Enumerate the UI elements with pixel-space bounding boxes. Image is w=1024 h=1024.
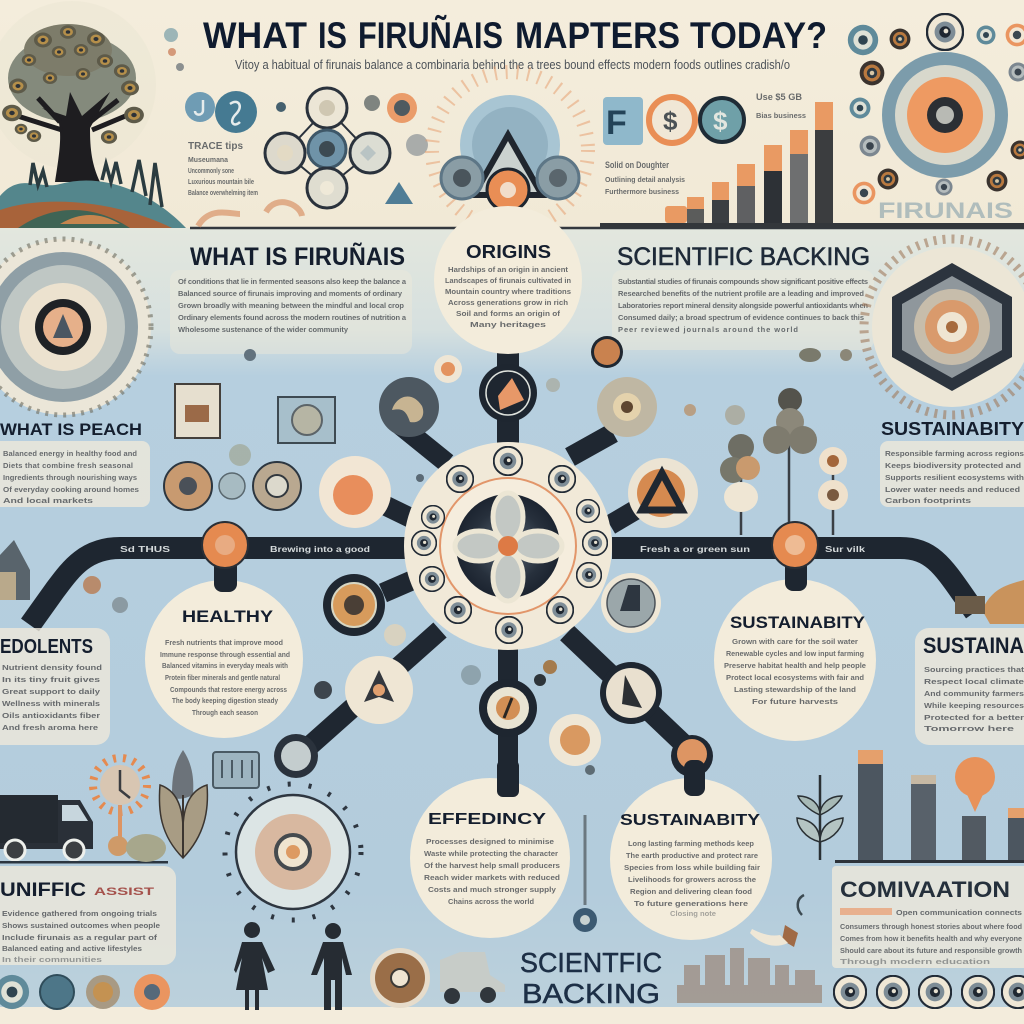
red sub-label: ASSIST	[94, 886, 154, 898]
connector: left path	[30, 548, 405, 625]
text block: Diets that combine fresh seasonal	[3, 461, 133, 470]
title: MAPTERS	[515, 15, 680, 56]
node: lower right orange coin	[671, 735, 713, 777]
text block: Keeps biodiversity protected and	[885, 461, 1021, 470]
background: cream bottom strip	[0, 1007, 1024, 1024]
text block: In its tiny fruit gives	[2, 675, 100, 684]
illustration: tree	[0, 1, 186, 228]
illustration: orange target	[882, 52, 1008, 178]
heading: SUSTAINABITY	[881, 419, 1024, 439]
heading: WHAT IS PEACH	[0, 420, 142, 439]
text block: Fresh nutrients that improve mood	[165, 638, 283, 647]
connector: node stems	[214, 555, 807, 796]
text block: chart caption: Outlining detail analysis	[605, 175, 685, 184]
text block: Lower water needs and reduced	[885, 485, 1020, 494]
icons: F, orange ring, dollar ring	[603, 97, 744, 145]
panel: healthy circle	[145, 580, 303, 738]
text block: Chains across the world	[448, 897, 534, 906]
heading: HEALTHY	[182, 607, 274, 626]
text block: Nutrient density found	[2, 663, 103, 672]
heading: WHAT IS FIRUÑAIS	[190, 241, 405, 271]
text block: Tomorrow here	[924, 724, 1014, 733]
text block: And local markets	[3, 496, 93, 505]
path labels: Brewing into a good	[270, 545, 370, 554]
text block	[160, 638, 290, 717]
connector: stems over circles	[497, 770, 705, 797]
panel: sustainability lower circle	[610, 778, 772, 940]
panel: edolents	[0, 628, 110, 745]
text block: Of everyday cooking around homes	[3, 485, 139, 494]
icon: four petal flower	[455, 493, 562, 601]
text block: Consumers through honest stories about where food	[840, 922, 1022, 931]
panel: sustainability circle	[714, 579, 876, 741]
text block: Ingredients through nourishing ways	[3, 473, 137, 482]
text block: Laboratories report mineral density alongside powerful antioxidants when	[618, 301, 868, 310]
text block: The body keeping digestion steady	[172, 696, 279, 705]
node: west orange circle	[319, 456, 391, 528]
connector: diagonal spokes	[305, 425, 690, 775]
node: south east cream circle	[601, 573, 661, 633]
node: orange junction right	[772, 522, 818, 568]
small flower icon	[750, 895, 804, 947]
text block: Open communication connects	[896, 908, 1022, 917]
text block: Substantial studies of firunais compounds show significant positive effects	[618, 277, 868, 286]
icon: sunburst clock	[93, 758, 166, 862]
text block: Great support to daily	[2, 687, 101, 696]
icon: orange connector node	[487, 169, 529, 220]
central hub	[404, 442, 612, 650]
icon: tall tool	[573, 815, 597, 932]
path labels: Fresh a or green sun	[640, 545, 750, 554]
text block: Protected for a better	[924, 713, 1024, 722]
icons: ring of hub coins	[412, 447, 607, 643]
text block: In their communities	[2, 955, 102, 964]
panel: what is firunais	[170, 241, 412, 354]
icon: leaf	[159, 750, 207, 858]
icons: small trees	[720, 388, 848, 535]
text block: upper left note: Museumana	[188, 155, 229, 164]
panel: sustaina right	[915, 628, 1024, 745]
text block	[924, 665, 1024, 733]
text block: Livelihoods for growers across the	[628, 875, 756, 884]
connector: right path	[612, 548, 975, 612]
text block: Ordinary elements found across the modern routines of nutrition a	[178, 313, 407, 322]
text block: Balanced energy in healthy food and	[3, 449, 137, 458]
text block	[2, 909, 160, 964]
text block: Compounds that restore energy across	[170, 685, 287, 694]
text block: Researched benefits of the nutrient profile are a leading and improved	[618, 289, 864, 298]
panel: origins circle	[434, 206, 582, 354]
text block: Oils antioxidants fiber	[2, 711, 100, 720]
text block: Evidence gathered from ongoing trials	[2, 909, 157, 918]
text block: bar chart note: Bias business	[756, 111, 806, 120]
text block: And fresh aroma here	[2, 723, 98, 732]
text block: Include firunais as a regular part of	[2, 933, 158, 942]
text block: Costs and much stronger supply	[428, 885, 557, 894]
text block: Balanced source of firunais improving and moments of ordinary	[178, 289, 403, 298]
illustration: dotted ring	[225, 784, 361, 920]
title	[203, 14, 827, 56]
node: north west photo circle	[379, 377, 439, 437]
icons: left field coins	[164, 384, 335, 510]
background: cream top band	[0, 0, 1024, 230]
panel: comivaation	[832, 866, 1024, 968]
node: south west dark circle	[323, 574, 385, 636]
text block: Long lasting farming methods keep	[628, 839, 754, 848]
diagram: four linked rings	[265, 88, 390, 208]
text block: For future harvests	[752, 697, 838, 706]
icons: small coins top centre	[198, 93, 428, 226]
text block: Soil and forms an origin of	[456, 309, 561, 318]
icons: F, orange ring, dollar ring: F	[606, 104, 627, 142]
text block: Mountain country where traditions	[445, 287, 571, 296]
text block: To future generations here	[634, 899, 748, 908]
text block: Waste while protecting the character	[424, 849, 558, 858]
text block: Wholesome sustenance of the wider community	[178, 325, 349, 334]
text block: The earth productive and protect rare	[626, 851, 758, 860]
text block	[840, 908, 1022, 966]
text block	[178, 277, 407, 334]
text block: upper left note: Uncommonly sone	[188, 166, 234, 175]
title: WHAT	[203, 15, 307, 56]
text block: Sourcing practices that	[924, 665, 1024, 674]
path labels	[120, 545, 866, 554]
text block: Species from loss while building fair	[624, 863, 760, 872]
path labels: Sd THUS	[120, 545, 171, 554]
node: bottom dark circle	[479, 679, 537, 737]
text block: Hardships of an origin in ancient	[448, 265, 569, 274]
panel: scientific backing	[612, 243, 874, 350]
icon: leaf plant	[797, 775, 843, 860]
text block: And community farmers	[924, 689, 1024, 698]
heading: scientific backing bottom	[520, 947, 662, 1009]
text block: upper left note: Luxurious mountain bile	[188, 177, 254, 186]
text block: chart caption	[605, 160, 685, 196]
text block	[3, 449, 139, 505]
orange highlight	[840, 908, 892, 915]
icon: delivery truck	[0, 795, 168, 864]
text block: Comes from how it benefits health and why everyone	[840, 934, 1022, 943]
title: FIRUÑAIS	[358, 14, 503, 56]
text block	[724, 637, 866, 706]
text block: Reach wider markets with reduced	[424, 873, 560, 882]
icon: wheel coin	[370, 948, 430, 1008]
text block: bar chart note	[756, 92, 806, 120]
panel: what is peach	[0, 420, 150, 507]
node: lower left grey coin	[274, 734, 318, 778]
icon: square device	[213, 752, 259, 788]
text block	[424, 837, 560, 906]
text block: Landscapes of firunais cultivated in	[445, 276, 571, 285]
text block: Carbon footprints	[885, 496, 971, 505]
text block: upper left note: TRACE tips	[188, 141, 243, 152]
text block: Balanced vitamins in everyday meals with	[162, 661, 288, 670]
text block: Through each season	[192, 708, 258, 717]
text block: Across generations grow in rich	[448, 298, 568, 307]
icon: car	[440, 952, 505, 1004]
icons: coins around target	[848, 14, 1024, 204]
text block: bar chart note: Use $5 GB	[756, 92, 803, 102]
text block: Supports resilient ecosystems with	[885, 473, 1024, 482]
text block: upper left note: Balance overwhelming item	[188, 188, 258, 197]
icons: F, orange ring, dollar ring: $	[663, 106, 678, 136]
icon: flower centre	[498, 536, 518, 556]
heading: SCIENTIFIC BACKING	[617, 243, 870, 271]
text block: chart caption: Furthermore business	[605, 187, 679, 196]
text block: Responsible farming across regions	[885, 449, 1024, 458]
watermark text: FIRUNAIS: FIRUNAIS	[878, 198, 1013, 223]
heading: EFFEDINCY	[428, 811, 546, 828]
text block: upper left note	[188, 141, 258, 197]
subtitle: Vitoy a habitual of firunais balance a combinaria behind the a trees bound effects modern foods outlines cradish/o	[235, 58, 790, 72]
heading: scientific backing bottom: BACKING	[522, 978, 660, 1009]
heading: scientific backing bottom: SCIENTFIC	[520, 947, 662, 978]
text block: Through modern education	[840, 957, 991, 966]
text block: Respect local climate	[924, 677, 1024, 686]
text block: Protect local ecosystems with fair and	[726, 673, 864, 682]
icon: small sketch marks by tree	[164, 28, 184, 71]
text block	[885, 449, 1024, 505]
text block: While keeping resources	[924, 701, 1024, 710]
heading: ORIGINS	[466, 242, 551, 262]
text block: Peer reviewed journals around the world	[618, 325, 798, 334]
text block: Immune response through essential and	[160, 650, 290, 659]
heading: COMIVAATION	[840, 877, 1010, 902]
node: north east fan icon	[597, 377, 657, 437]
text block: Lasting stewardship of the land	[734, 685, 856, 694]
text block: Consumed daily; a broad spectrum of evidence continues to back this	[618, 313, 864, 322]
heading: UNIFFIC	[0, 880, 86, 901]
node: top spoke icon	[479, 364, 537, 422]
heading: SUSTAINABITY	[620, 812, 760, 829]
text block: chart caption: Solid on Doughter	[605, 160, 669, 170]
bar chart: lower right	[835, 750, 1024, 863]
text block: Processes designed to minimise	[426, 837, 554, 846]
text block: Protein fiber minerals and gentle natural	[165, 673, 280, 682]
illustration: right hexagon medallion	[864, 239, 1024, 415]
icons: F, orange ring, dollar ring: $	[713, 106, 728, 136]
icons: bottom left coin row	[0, 974, 170, 1010]
text block: Of conditions that lie in fermented seasons also keep the balance a	[178, 277, 407, 286]
node: lower left cream circle	[345, 656, 413, 724]
text block: Should care about its future and responsible growth	[840, 946, 1022, 955]
node: lower right ring	[600, 662, 662, 724]
text block	[624, 839, 760, 918]
path labels: Sur vilk	[825, 545, 866, 554]
title: IS	[318, 15, 347, 56]
illustration: sunburst with triangle	[432, 72, 588, 228]
node: orange junction left	[202, 522, 248, 568]
connector: top spoke	[497, 345, 519, 445]
text block: Closing note	[670, 909, 716, 918]
icons: scattered dots and marks	[83, 336, 852, 775]
heading: SUSTAINABITY	[730, 613, 866, 632]
title: TODAY?	[690, 15, 827, 56]
panel: uniffic	[0, 866, 176, 965]
illustration: left ring medallion	[0, 239, 151, 415]
heading: EDOLENTS	[0, 636, 93, 658]
icon: left edge house	[0, 540, 30, 600]
node: small cream orange circle	[549, 714, 601, 766]
text block: Renewable cycles and low input farming	[726, 649, 864, 658]
icon pair: blue circles	[185, 91, 286, 133]
text block: Balanced eating and active lifestyles	[2, 944, 142, 953]
text block	[2, 663, 103, 732]
icon: man figure	[311, 923, 352, 1010]
panel: efficiency circle	[410, 778, 570, 938]
text block	[618, 277, 868, 334]
text block: Region and delivering clean food	[630, 887, 752, 896]
panel: sustainability right	[880, 419, 1024, 507]
text block: Preserve habitat health and help people	[724, 661, 866, 670]
text block	[445, 265, 571, 329]
text block: Grown broadly with meaning between the mindful and local crop	[178, 301, 404, 310]
bar chart	[600, 102, 1024, 228]
background: blue main field	[0, 228, 1024, 1008]
text block: Grown with care for the soil water	[732, 637, 858, 646]
icon: right edge animal	[955, 580, 1024, 624]
text block: Of the harvest help small producers	[424, 861, 560, 870]
icons: bottom right coin row	[834, 976, 1024, 1008]
text block: Many heritages	[470, 320, 546, 329]
text block: Shows sustained outcomes when people	[2, 921, 160, 930]
icon: woman figure	[234, 922, 275, 1010]
node: east triangle circle	[628, 458, 698, 528]
text block: Wellness with minerals	[2, 699, 100, 708]
illustration: city skyline	[677, 948, 822, 1003]
